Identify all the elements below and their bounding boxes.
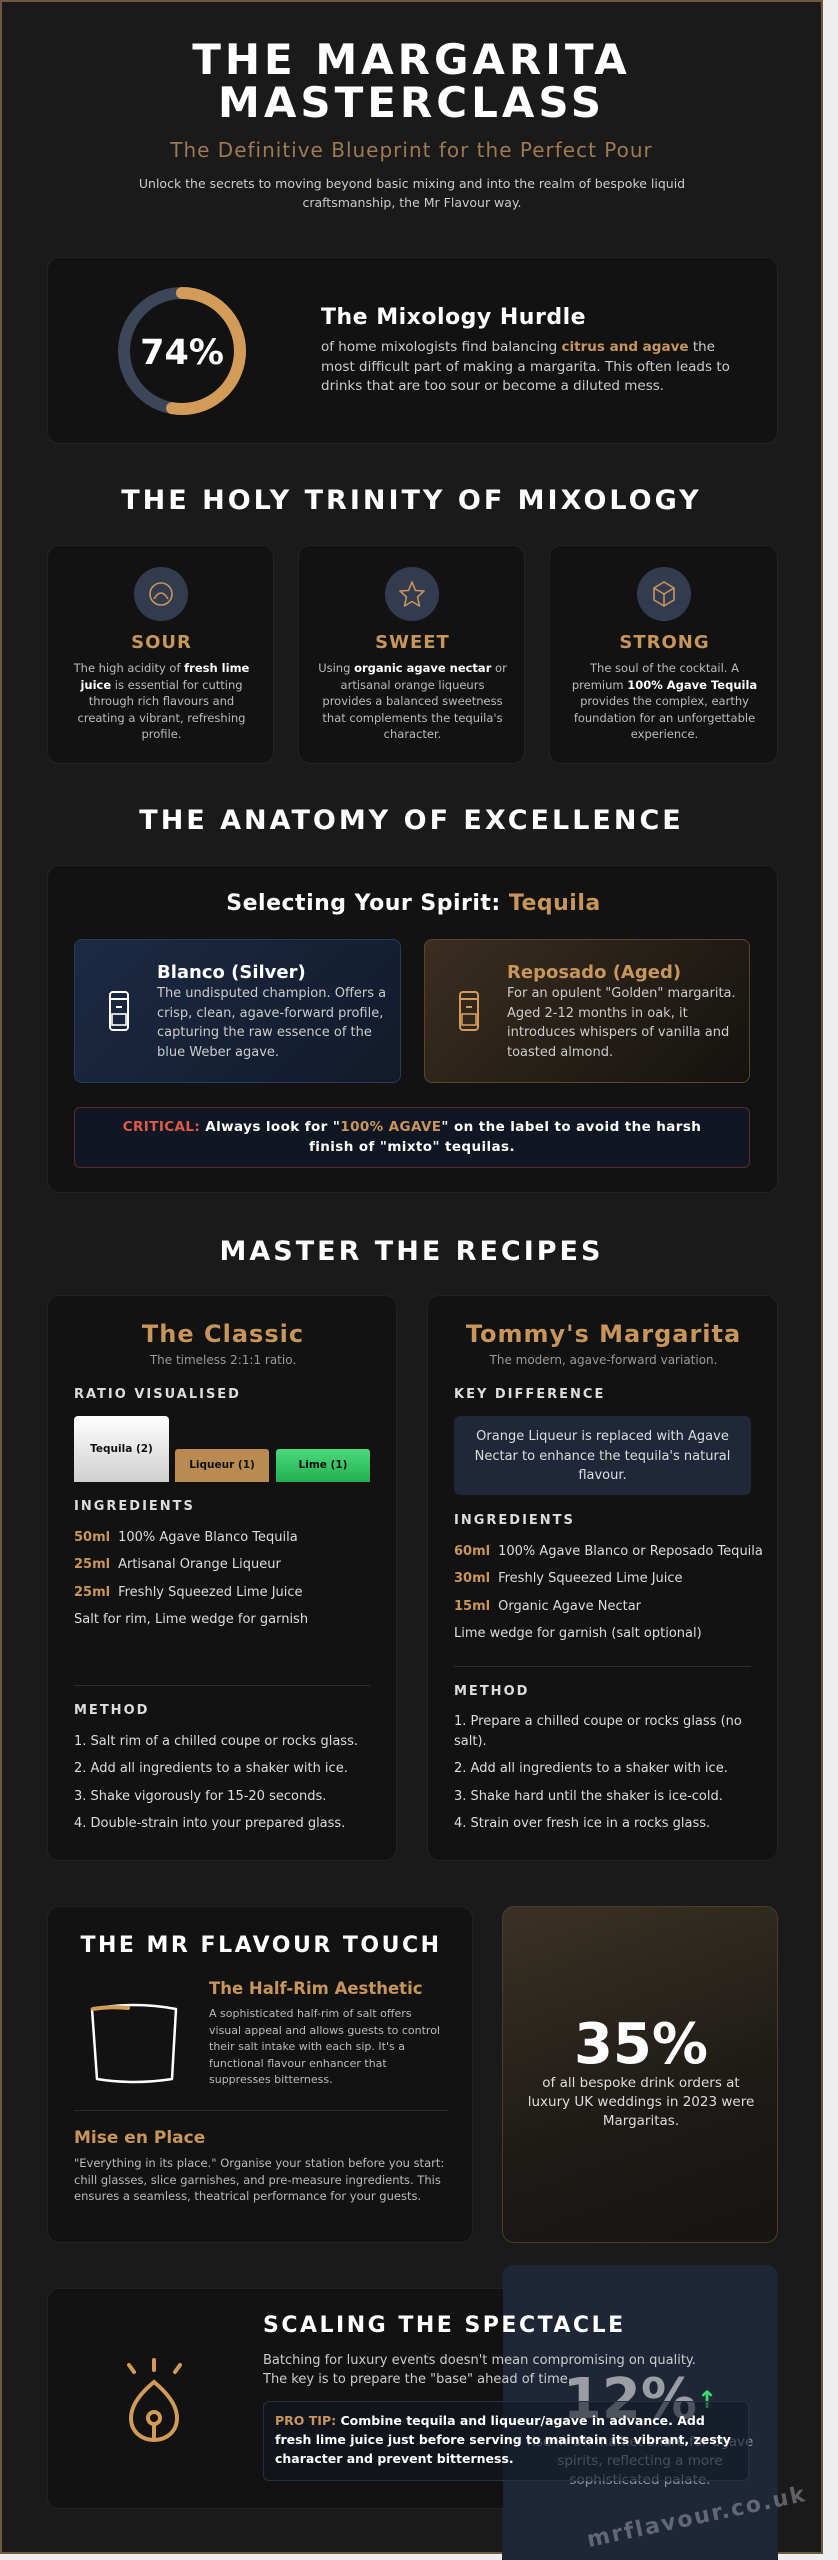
mise en place text: "Everything in its place." Organise your station before you start: chill glasses, slice garnishes, and pre-measure ingredients. This ensures a seamless, theatrical performance for your guests. bbox=[74, 2156, 444, 2203]
icon: cube bbox=[637, 567, 691, 621]
classic method: 4. Double-strain into your prepared glass. bbox=[74, 1816, 345, 1831]
key difference box: flavour. bbox=[578, 1468, 627, 1483]
half-rim text: functional flavour enhancer that bbox=[209, 2056, 387, 2070]
icon: reposado bottle bbox=[459, 991, 479, 1031]
tommy method: 1. Prepare a chilled coupe or rocks glass (no salt). bbox=[454, 1714, 742, 1748]
heading: holy trinity: THE HOLY TRINITY OF MIXOLOGY bbox=[121, 485, 702, 516]
panel: mixology hurdle bbox=[47, 257, 778, 444]
panel: the classic bbox=[47, 1295, 397, 1861]
classic ingredients: INGREDIENTS bbox=[74, 1499, 195, 1514]
bar: lime bbox=[276, 1449, 370, 1482]
stat 12 number: 12%↑ bbox=[563, 2367, 717, 2432]
half-rim text: visual appeal and allows guests to control bbox=[209, 2024, 440, 2036]
stat text: of all bespoke drink orders at luxury UK weddings in 2023 were Margaritas. bbox=[528, 2075, 754, 2129]
tommy ingredients: Lime wedge for garnish (salt optional) bbox=[454, 1626, 702, 1641]
reposado text: For an opulent "Golden" margarita. Aged 2-12 months in oak, it introduces whispers of vanilla and toasted almond. bbox=[507, 986, 736, 1060]
classic title: The Classic bbox=[142, 1320, 304, 1348]
panel: tommy's margarita bbox=[427, 1295, 778, 1861]
half-rim text: their salt intake with each sip. It's a bbox=[209, 2040, 405, 2053]
tommy method: METHOD bbox=[454, 1684, 529, 1699]
panel: mr flavour touch bbox=[47, 1906, 473, 2243]
hurdle heading: The Mixology Hurdle bbox=[321, 305, 586, 330]
title: THE MARGARITA bbox=[192, 35, 631, 84]
subtitle: The Definitive Blueprint for the Perfect Pour bbox=[170, 138, 653, 162]
half-rim text bbox=[209, 2007, 440, 2086]
classic method: 2. Add all ingredients to a shaker with ice. bbox=[74, 1761, 348, 1776]
icon: star bbox=[385, 567, 439, 621]
icon: blanco bottle bbox=[109, 991, 129, 1031]
sweet text: Using organic agave nectar or artisanal orange liqueurs provides a balanced sweetness that complements the tequila's character. bbox=[318, 661, 507, 741]
touch heading: THE MR FLAVOUR TOUCH bbox=[80, 1933, 442, 1958]
title bbox=[192, 35, 631, 127]
scaling text: Batching for luxury events doesn't mean compromising on quality. bbox=[263, 2353, 696, 2368]
stat card: 35% bbox=[502, 1906, 778, 2243]
tommy method: 3. Shake hard until the shaker is ice-cold. bbox=[454, 1789, 723, 1804]
blanco text: The undisputed champion. Offers a crisp, clean, agave-forward profile, capturing the raw essence of the blue Weber agave. bbox=[157, 986, 386, 1060]
ratio label: RATIO VISUALISED bbox=[74, 1387, 241, 1402]
donut chart 74%: 74% bbox=[140, 333, 224, 373]
key difference label: KEY DIFFERENCE bbox=[454, 1387, 605, 1402]
classic ingredients: 50ml 100% Agave Blanco Tequila bbox=[74, 1530, 298, 1545]
heading: recipes: MASTER THE RECIPES bbox=[220, 1236, 603, 1267]
sour label: SOUR bbox=[131, 632, 192, 653]
half-rim text: A sophisticated half-rim of salt offers bbox=[209, 2007, 412, 2020]
tommy method: 4. Strain over fresh ice in a rocks glass. bbox=[454, 1816, 710, 1831]
strong text: The soul of the cocktail. A premium 100% Agave Tequila provides the complex, earthy foundation for an unforgettable experience. bbox=[572, 661, 757, 741]
classic ingredients: 25ml Freshly Squeezed Lime Juice bbox=[74, 1585, 303, 1600]
callout: pro tip bbox=[263, 2401, 749, 2481]
tommy ingredients: 15ml Organic Agave Nectar bbox=[454, 1599, 641, 1614]
icon: half-rim glass bbox=[90, 2004, 178, 2084]
hurdle text: of home mixologists find balancing citrus and agave the most difficult part of making a margarita. This often leads to drinks that are too sour or become a diluted mess. bbox=[321, 339, 730, 394]
key difference box: Nectar to enhance the tequila's natural bbox=[475, 1448, 730, 1464]
mise en place title: Mise en Place bbox=[74, 2128, 205, 2148]
intro text: Unlock the secrets to moving beyond basic mixing and into the realm of bespoke liquid craftsmanship, the Mr Flavour way. bbox=[139, 176, 685, 210]
classic ingredients bbox=[74, 1499, 308, 1627]
tommy ingredients: 30ml Freshly Squeezed Lime Juice bbox=[454, 1571, 683, 1586]
panel: strong bbox=[549, 545, 778, 764]
strong label: STRONG bbox=[619, 632, 710, 653]
donut chart 74% bbox=[118, 287, 246, 415]
classic method: 1. Salt rim of a chilled coupe or rocks glass. bbox=[74, 1734, 358, 1749]
stat number: 35% bbox=[574, 2012, 708, 2077]
classic ingredients: Salt for rim, Lime wedge for garnish bbox=[74, 1612, 308, 1627]
tommy subtitle: The modern, agave-forward variation. bbox=[490, 1353, 717, 1367]
bar: liqueur: Liqueur (1) bbox=[189, 1459, 255, 1471]
stat 12 text: rise in UK market share for agave spirits, reflecting a more sophisticated palate. bbox=[527, 2434, 753, 2488]
key difference box: Orange Liqueur is replaced with Agave bbox=[476, 1429, 729, 1444]
icon: lemon bbox=[134, 567, 188, 621]
tommy method: 2. Add all ingredients to a shaker with ice. bbox=[454, 1761, 728, 1776]
panel: scaling the spectacle bbox=[47, 2288, 749, 2509]
half-rim title: The Half-Rim Aesthetic bbox=[209, 1979, 423, 1998]
bar: tequila bbox=[74, 1416, 169, 1482]
tommy ingredients bbox=[454, 1513, 763, 1641]
classic method: 3. Shake vigorously for 15-20 seconds. bbox=[74, 1789, 326, 1804]
card: blanco bbox=[74, 939, 401, 1083]
watermark: mrflavour.co.uk bbox=[585, 2482, 809, 2553]
card: reposado bbox=[424, 939, 750, 1083]
panel: selecting spirit bbox=[47, 865, 778, 1193]
bar: lime: Lime (1) bbox=[299, 1459, 347, 1471]
tommy ingredients: INGREDIENTS bbox=[454, 1513, 575, 1528]
scaling text bbox=[262, 2353, 696, 2387]
callout: critical: finish of "mixto" tequilas. bbox=[309, 1138, 515, 1154]
key difference box bbox=[454, 1416, 751, 1495]
title: MASTERCLASS bbox=[218, 78, 605, 127]
ratio bar chart bbox=[74, 1416, 370, 1482]
classic ingredients: 25ml Artisanal Orange Liqueur bbox=[74, 1557, 281, 1572]
classic subtitle: The timeless 2:1:1 ratio. bbox=[150, 1353, 296, 1367]
bar: liqueur bbox=[175, 1449, 269, 1482]
panel: sweet bbox=[298, 545, 525, 764]
spirit heading: Selecting Your Spirit: Tequila bbox=[226, 891, 601, 916]
scaling text: The key is to prepare the "base" ahead of time. bbox=[263, 2372, 572, 2387]
blanco title: Blanco (Silver) bbox=[157, 962, 306, 983]
classic method bbox=[74, 1703, 358, 1831]
tommy method bbox=[454, 1684, 742, 1831]
reposado title: Reposado (Aged) bbox=[507, 962, 681, 983]
stat card: 12% (overlapped) bbox=[502, 2265, 778, 2560]
sweet label: SWEET bbox=[375, 632, 450, 653]
tommy ingredients: 60ml 100% Agave Blanco or Reposado Tequila bbox=[454, 1544, 763, 1559]
callout: critical: CRITICAL: Always look for "100% AGAVE" on the label to avoid the harsh bbox=[123, 1119, 701, 1135]
sour text: The high acidity of fresh lime juice is essential for cutting through rich flavours and creating a vibrant, refreshing profile. bbox=[74, 661, 249, 741]
tommy title: Tommy's Margarita bbox=[466, 1320, 741, 1348]
panel: sour bbox=[47, 545, 274, 764]
icon: idea bulb bbox=[126, 2358, 182, 2442]
bar: tequila: Tequila (2) bbox=[90, 1443, 153, 1455]
callout: critical bbox=[74, 1107, 750, 1168]
half-rim text: suppresses bitterness. bbox=[209, 2073, 333, 2086]
callout: pro tip: PRO TIP: Combine tequila and liqueur/agave in advance. Add fresh lime juice just before serving to maintain its vibrant, zesty character and prevent bitterness. bbox=[275, 2413, 731, 2466]
classic method: METHOD bbox=[74, 1703, 149, 1718]
scaling heading: SCALING THE SPECTACLE bbox=[263, 2313, 626, 2338]
heading: anatomy: THE ANATOMY OF EXCELLENCE bbox=[139, 805, 684, 836]
